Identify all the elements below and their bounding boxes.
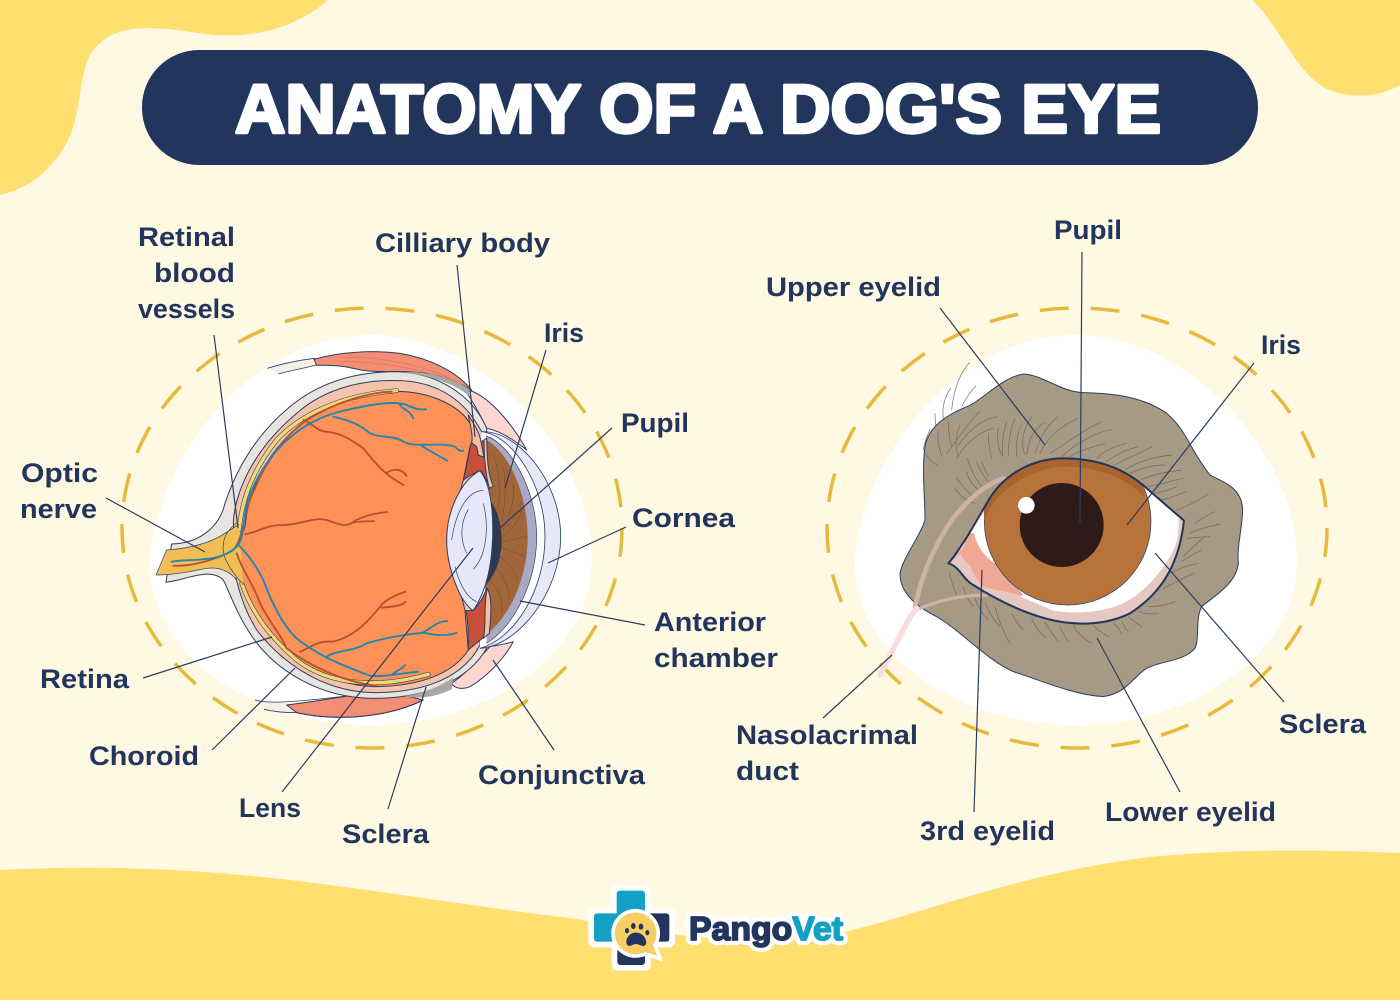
nasolacrimal duct xyxy=(880,478,1003,675)
label: lens xyxy=(239,548,473,823)
label: iris side xyxy=(505,318,584,488)
label: ciliary body xyxy=(375,228,550,437)
label: third eyelid: 3rd eyelid xyxy=(920,816,1055,846)
label: retinal blood vessels xyxy=(138,222,238,528)
label: choroid xyxy=(89,668,295,771)
label: upper eyelid: Upper eyelid xyxy=(766,272,941,302)
pupil xyxy=(486,499,502,585)
panel: front view backdrop xyxy=(827,308,1327,748)
title banner xyxy=(142,50,1258,165)
logo cross xyxy=(594,891,669,965)
label: optic nerve: nerve xyxy=(20,494,97,524)
eyelid fur xyxy=(900,374,1243,697)
diagram: eye cross-section xyxy=(156,352,561,717)
fur hairs xyxy=(925,412,1220,643)
retinal arteries xyxy=(173,392,407,686)
iris xyxy=(984,459,1152,606)
label: retinal blood vessels: blood xyxy=(154,258,235,288)
label: anterior chamber: chamber xyxy=(654,643,779,673)
label: anterior chamber xyxy=(520,601,779,673)
label: ciliary body: Cilliary body xyxy=(375,228,550,258)
logo paw xyxy=(625,923,649,946)
label: conjunctiva: Conjunctiva xyxy=(478,760,646,790)
label: optic nerve: Optic xyxy=(21,458,98,488)
retina layer xyxy=(239,391,428,683)
lower eye muscle xyxy=(255,695,423,717)
diagram: front view of eye xyxy=(880,363,1243,697)
label: sclera side xyxy=(342,687,430,849)
conjunctiva xyxy=(452,390,527,688)
label: choroid: Choroid xyxy=(89,741,199,771)
iris xyxy=(485,440,528,632)
pupil highlight xyxy=(1018,497,1035,514)
pupil xyxy=(1020,483,1104,567)
third eyelid and lower lid rim xyxy=(950,518,1183,623)
anterior chamber xyxy=(480,432,545,648)
label: cornea: Cornea xyxy=(632,503,736,533)
sclera grey patches xyxy=(403,372,470,698)
label: lower eyelid xyxy=(1097,638,1276,827)
label: pupil side: Pupil xyxy=(621,408,689,438)
logo speech bubble xyxy=(613,911,660,959)
label: nasolacrimal duct xyxy=(736,655,918,786)
label: iris front xyxy=(1127,330,1301,525)
logo cross outline xyxy=(594,891,669,965)
choroid layer xyxy=(233,381,487,693)
label: conjunctiva xyxy=(478,660,646,790)
optic nerve xyxy=(156,522,243,585)
top left yellow blob xyxy=(0,0,328,195)
panel: side view backdrop xyxy=(122,308,622,748)
label: lens: Lens xyxy=(239,793,301,823)
label: sclera front xyxy=(1155,553,1367,739)
eye outline xyxy=(948,458,1184,624)
label: sclera side: Sclera xyxy=(342,819,430,849)
top right yellow blob xyxy=(1253,0,1400,96)
ciliary muscle xyxy=(463,440,490,650)
label: retinal blood vessels: Retinal xyxy=(138,222,235,252)
stray hairs xyxy=(923,363,976,450)
bottom yellow wave xyxy=(0,850,1400,1000)
label: iris front: Iris xyxy=(1261,330,1301,360)
retinal veins xyxy=(172,403,463,676)
label: pupil side xyxy=(500,408,689,528)
vitreous body xyxy=(235,391,473,687)
label: retina: Retina xyxy=(40,664,130,694)
title banner: ANATOMY OF A DOG'S EYE xyxy=(235,70,1161,148)
lens xyxy=(447,471,493,611)
label: retina xyxy=(40,637,272,694)
label: nasolacrimal duct: Nasolacrimal xyxy=(736,720,918,750)
label: optic nerve xyxy=(20,458,205,552)
label: third eyelid xyxy=(920,570,1055,846)
logo: PangoVet xyxy=(594,891,843,965)
label: lower eyelid: Lower eyelid xyxy=(1105,797,1276,827)
label: sclera front: Sclera xyxy=(1279,709,1367,739)
eye white xyxy=(948,458,1184,624)
upper eye muscle xyxy=(267,352,472,390)
logo wordmark: PangoVet xyxy=(689,911,843,948)
ciliary body xyxy=(468,415,493,638)
label: anterior chamber: Anterior xyxy=(654,607,767,637)
label: iris side: Iris xyxy=(544,318,584,348)
cornea xyxy=(480,432,561,648)
label: cornea xyxy=(548,503,736,563)
label: upper eyelid xyxy=(766,272,1045,445)
sclera layer xyxy=(166,372,487,698)
label: retinal blood vessels: vessels xyxy=(138,294,235,324)
label: nasolacrimal duct: duct xyxy=(736,756,799,786)
label: pupil front: Pupil xyxy=(1054,215,1122,245)
logo wordmark: PangoVet xyxy=(689,911,843,948)
